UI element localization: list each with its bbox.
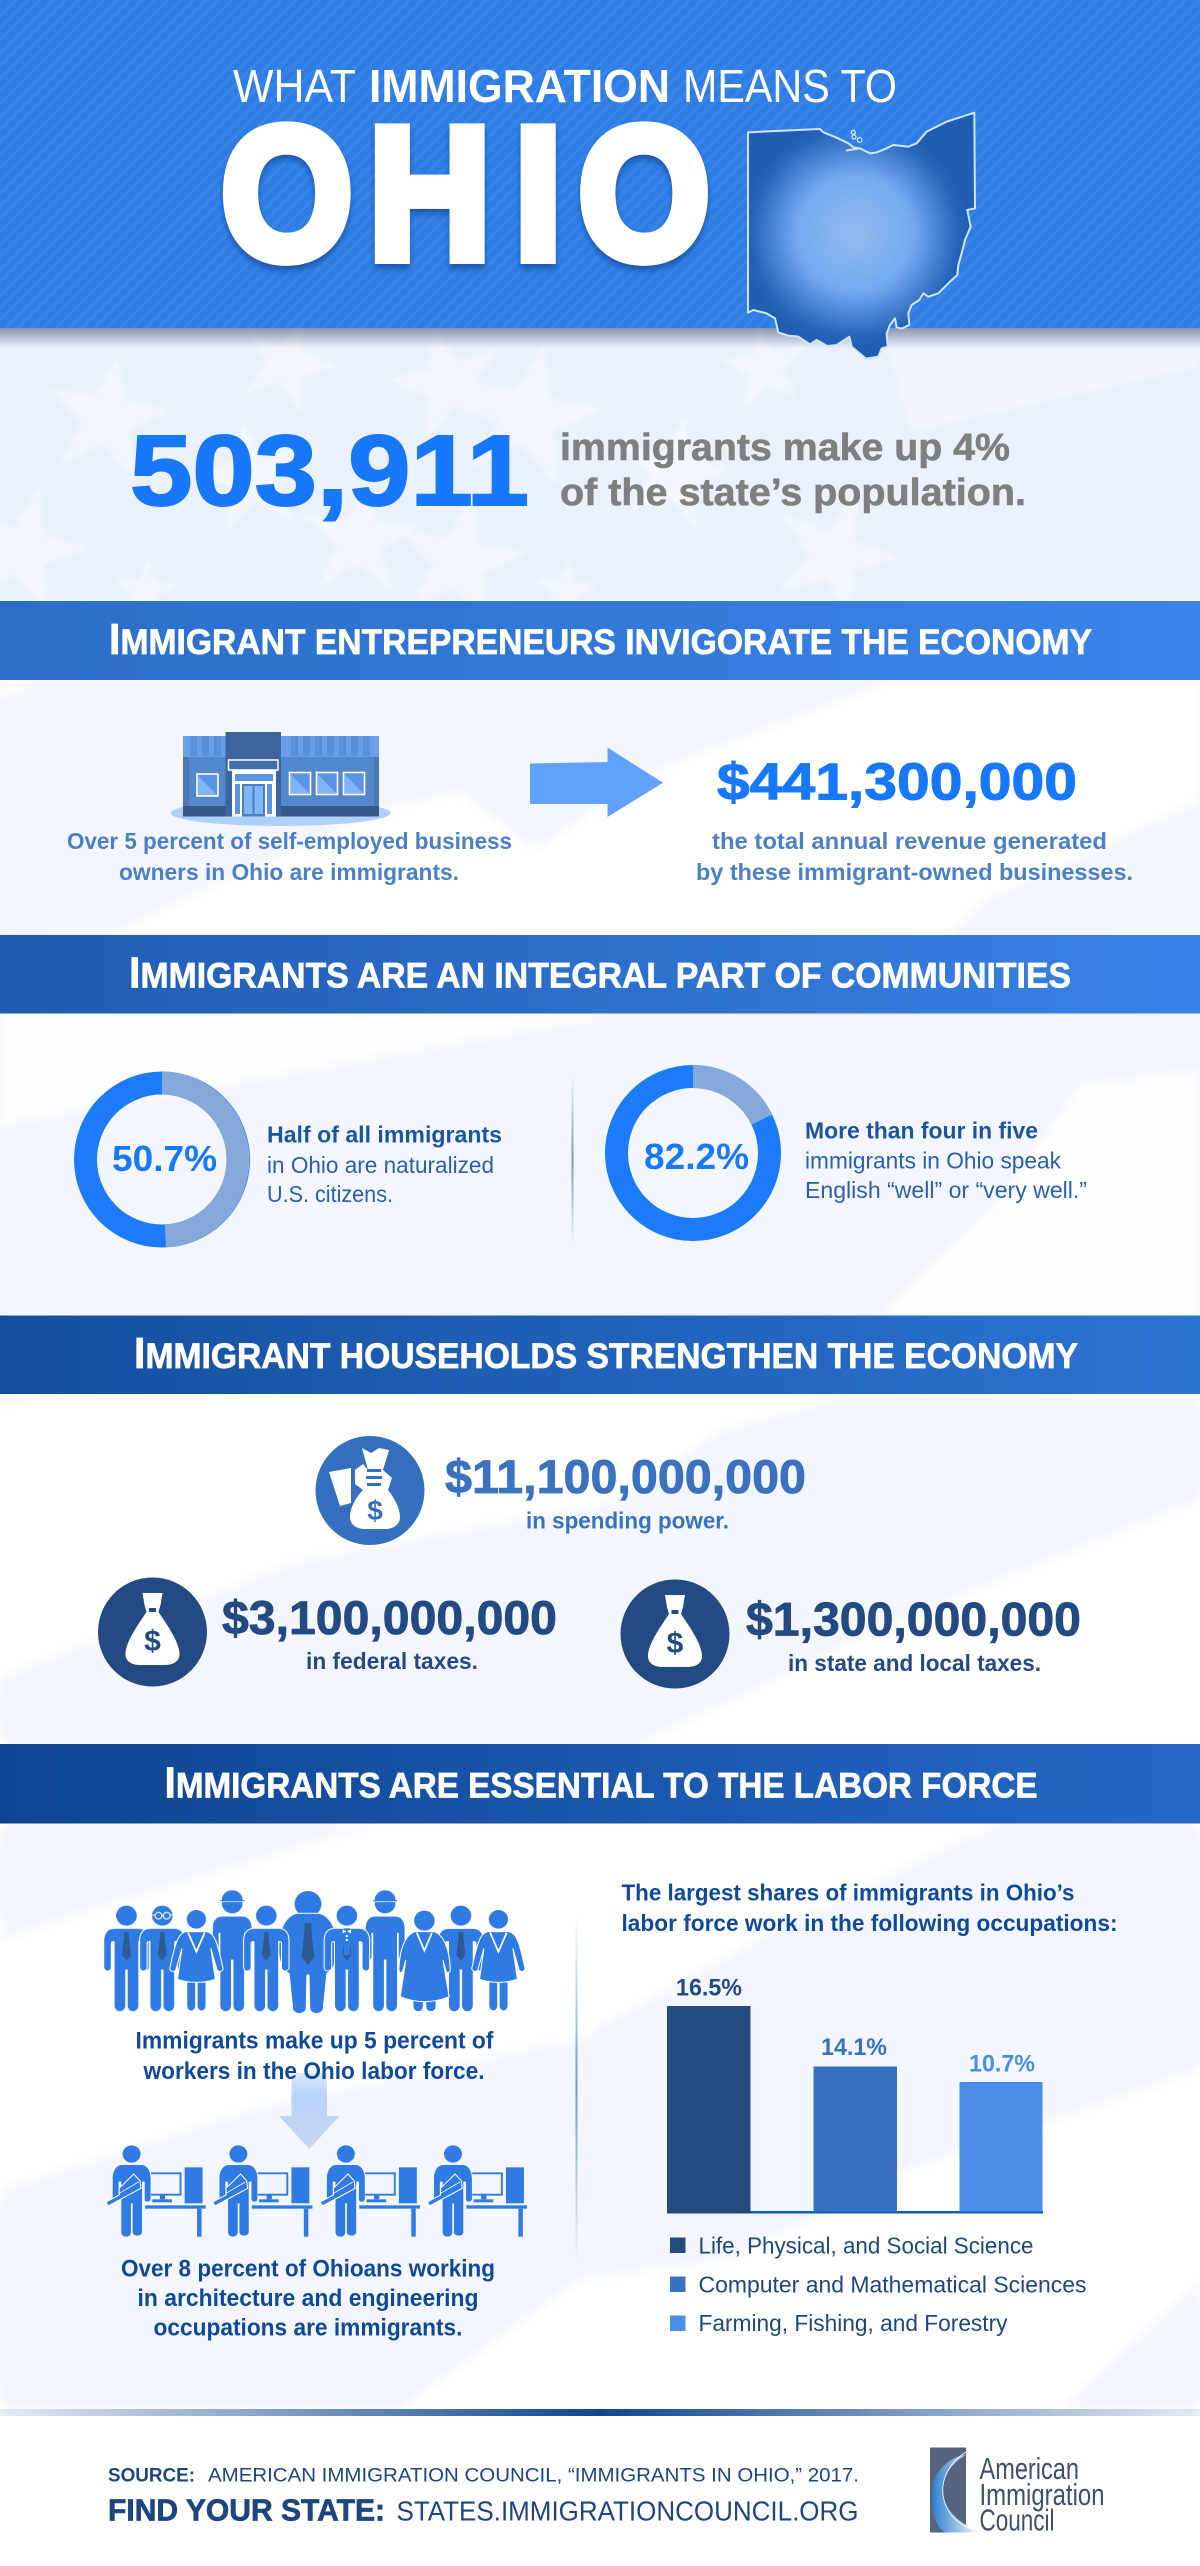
caption: architecture and engineering: in architecture and engineering (138, 2285, 478, 2312)
spending power statistic: $11,100,000,000 (445, 1450, 806, 1503)
section band: communities (0, 935, 1200, 1014)
donut chart: English speakers: 82.2% (644, 1136, 749, 1177)
icon: hand holding money bag: $ (367, 1495, 383, 1526)
donut chart: naturalized citizens: 50.7% (112, 1138, 217, 1179)
section band: labor force (0, 1744, 1200, 1824)
title: Ohio: OHIO (221, 89, 710, 298)
chart legend (670, 2232, 1086, 2336)
caption: labor force share: workers in the Ohio labor force. (143, 2058, 484, 2085)
bar: life, physical, and social science (667, 1974, 750, 2214)
logo: American Immigration Council (930, 2448, 1104, 2538)
icon: hand holding money bag (316, 1436, 424, 1545)
caption: labor force share (136, 2028, 494, 2085)
bar chart heading (622, 1880, 1118, 1936)
caption: architecture and engineering (121, 2256, 495, 2342)
chart legend: Computer and Mathematical Sciences (698, 2272, 1086, 2298)
icon: money bag, state and local taxes: $ (667, 1627, 684, 1660)
federal taxes statistic: in federal taxes. (306, 1648, 478, 1674)
section band: households (0, 1316, 1200, 1394)
caption: architecture and engineering: Over 8 percent of Ohioans working (121, 2256, 495, 2282)
text: English speakers (805, 1118, 1087, 1203)
text: English speakers: immigrants in Ohio speak (805, 1148, 1061, 1174)
caption: self-employed owners (67, 828, 512, 885)
arrow: right (530, 748, 663, 817)
population caption: immigrants make up 4% (560, 427, 1010, 469)
find your state line: FIND YOUR STATE: (108, 2492, 385, 2528)
federal taxes statistic (222, 1591, 557, 1674)
bar chart (667, 1974, 1043, 2214)
revenue caption: the total annual revenue generated (712, 828, 1107, 854)
revenue statistic: $441,300,000 (717, 754, 1077, 812)
arrow: down (279, 2073, 340, 2149)
spending power statistic: in spending power. (526, 1508, 729, 1534)
text: naturalized citizens: U.S. citizens. (267, 1181, 393, 1207)
caption: self-employed owners: owners in Ohio are immigrants. (119, 859, 459, 885)
source line: AMERICAN IMMIGRATION COUNCIL, “IMMIGRANTS IN OHIO,” 2017. (208, 2464, 859, 2486)
map of Ohio (748, 113, 975, 359)
title line: IMMIGRATION (369, 60, 670, 112)
header banner (0, 0, 1200, 359)
section band: entrepreneurs: IMMIGRANT ENTREPRENEURS INVIGORATE THE ECONOMY (109, 616, 1092, 664)
find your state line (108, 2492, 858, 2528)
population caption (560, 427, 1026, 514)
state and local taxes statistic: $1,300,000,000 (746, 1592, 1081, 1646)
bar: farming, fishing, and forestry: 10.7% (969, 2050, 1035, 2078)
title line: MEANS TO (683, 60, 897, 112)
revenue caption: by these immigrant-owned businesses. (696, 859, 1133, 885)
caption: labor force share: Immigrants make up 5 percent of (136, 2028, 494, 2054)
icon: storefront (170, 732, 390, 826)
text: naturalized citizens: in Ohio are naturalized (267, 1152, 494, 1178)
state and local taxes statistic: in state and local taxes. (788, 1650, 1041, 1676)
bar chart heading: labor force work in the following occupations: (622, 1910, 1118, 1936)
bar: computer and mathematical sciences (814, 2034, 897, 2212)
logo: American Immigration Council: Immigration (980, 2477, 1104, 2512)
section band: entrepreneurs (0, 601, 1200, 680)
chart legend: Farming, Fishing, and Forestry (698, 2310, 1008, 2336)
logo: American Immigration Council: American (980, 2451, 1079, 2486)
donut chart: English speakers (616, 1076, 770, 1230)
bar: farming, fishing, and forestry (960, 2050, 1042, 2212)
population statistic: 503,911 (130, 415, 529, 527)
icon: money bag, state and local taxes (620, 1580, 730, 1688)
donut chart: naturalized citizens (86, 1083, 238, 1236)
text: English speakers: More than four in five (805, 1118, 1038, 1144)
population caption: of the state’s population. (560, 472, 1026, 514)
source line: SOURCE: (108, 2464, 195, 2486)
find your state line: STATES.IMMIGRATIONCOUNCIL.ORG (396, 2496, 858, 2526)
icon: money bag, federal taxes (98, 1578, 207, 1686)
spending power statistic (445, 1450, 806, 1534)
chart legend: Life, Physical, and Social Science (698, 2232, 1034, 2258)
icon: money bag, federal taxes: $ (144, 1625, 161, 1658)
population statistic (130, 415, 1026, 527)
icon: group of workers (104, 1890, 525, 2013)
icon: architects and engineers at desks (106, 2145, 527, 2237)
title line: WHAT (233, 60, 356, 112)
bar chart heading: The largest shares of immigrants in Ohio’s (622, 1880, 1074, 1906)
revenue statistic (696, 754, 1133, 885)
bar: life, physical, and social science: 16.5% (676, 1974, 742, 2002)
federal taxes statistic: $3,100,000,000 (222, 1591, 557, 1644)
section band: communities: IMMIGRANTS ARE AN INTEGRAL PART OF COMMUNITIES (129, 950, 1071, 998)
text: English speakers: English “well” or “very well.” (805, 1177, 1087, 1203)
section band: households: IMMIGRANT HOUSEHOLDS STRENGTHEN THE ECONOMY (134, 1330, 1078, 1378)
state and local taxes statistic (746, 1592, 1081, 1676)
bar: computer and mathematical sciences: 14.1% (821, 2034, 887, 2061)
section band: labor force: IMMIGRANTS ARE ESSENTIAL TO THE LABOR FORCE (164, 1760, 1038, 1808)
text: naturalized citizens (267, 1122, 502, 1207)
text: naturalized citizens: Half of all immigrants (267, 1122, 502, 1148)
caption: self-employed owners: Over 5 percent of self-employed business (67, 828, 512, 854)
revenue caption (696, 828, 1133, 885)
logo: American Immigration Council: Council (980, 2502, 1054, 2538)
title line (233, 60, 897, 112)
caption: architecture and engineering: occupations are immigrants. (154, 2314, 462, 2342)
footer (0, 2409, 1200, 2566)
